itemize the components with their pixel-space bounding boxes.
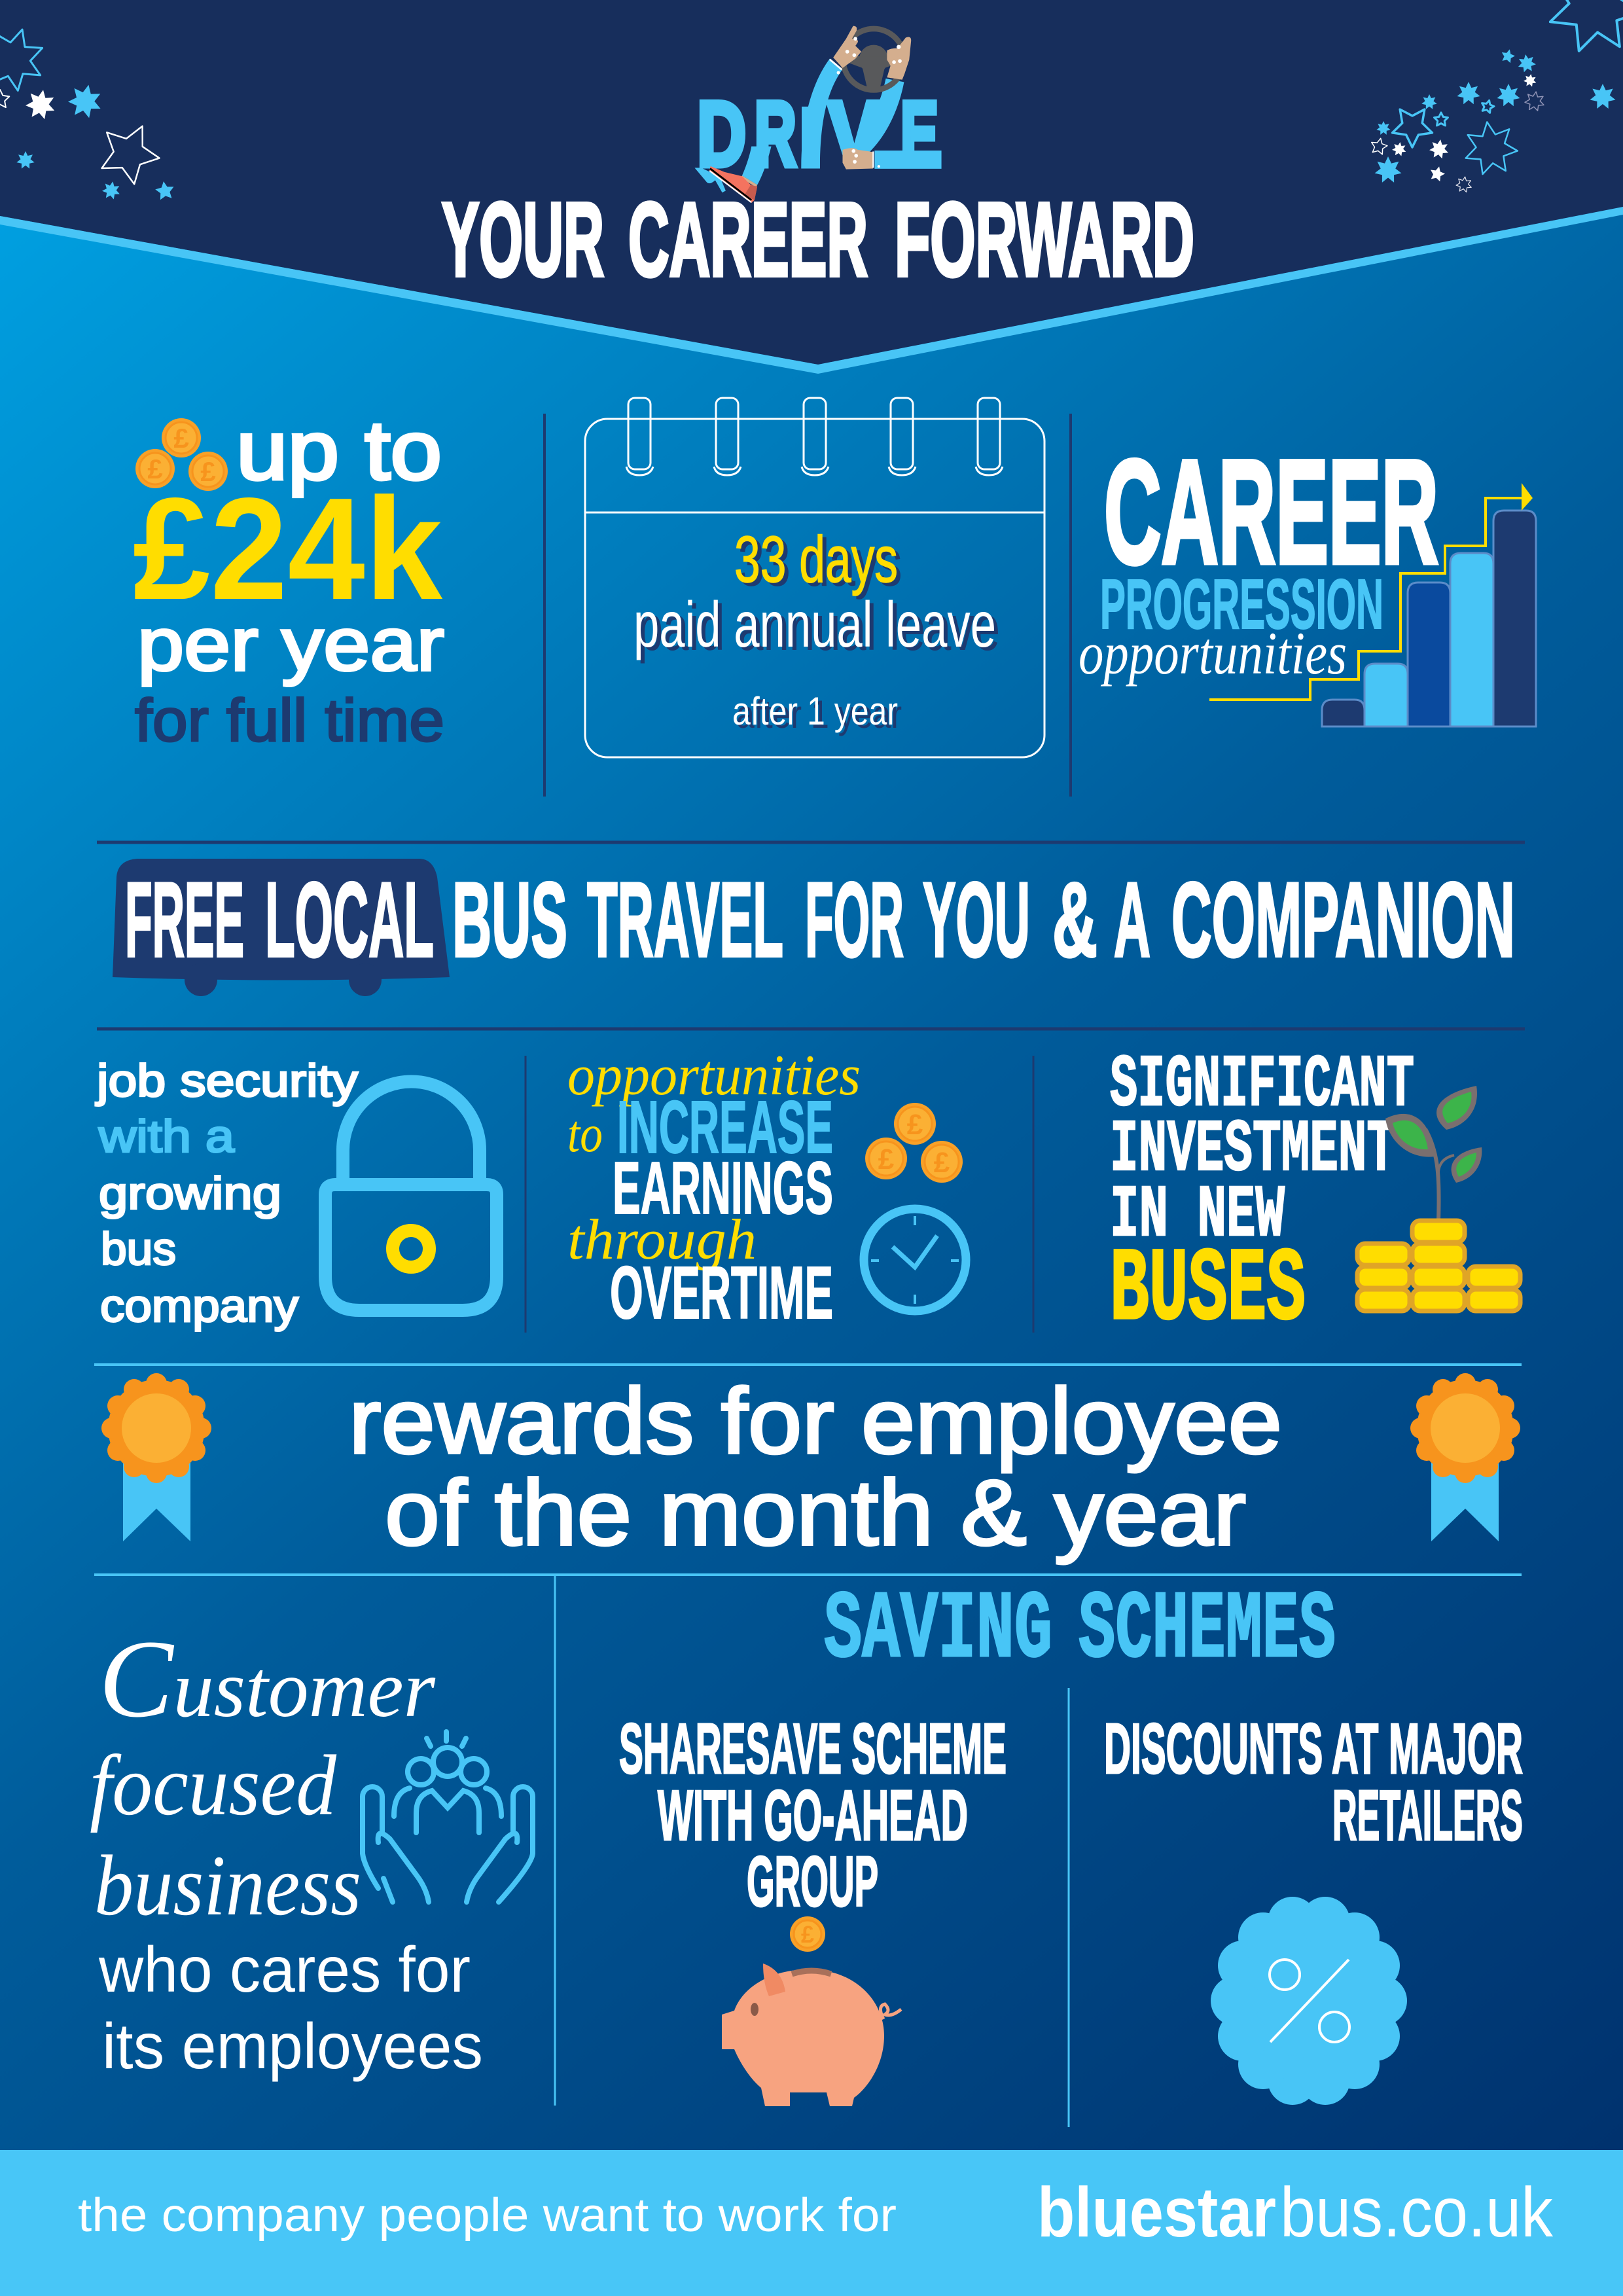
divider: below rewards: [94, 1573, 1522, 1576]
leave text: [633, 523, 996, 733]
divider: above benefits row: [97, 1028, 1525, 1030]
panel: investment in buses: [1110, 1044, 1520, 1350]
title: FORWARD: [895, 181, 1194, 298]
panel: job security: [96, 1055, 497, 1331]
bus travel text: &: [1052, 861, 1097, 979]
earnings text: through: [567, 1208, 757, 1272]
title: [442, 181, 1194, 298]
leave text: 33 days: [734, 523, 898, 596]
divider: above bus row: [97, 840, 1525, 844]
discounts text: [1104, 1709, 1523, 1856]
customer text: [90, 1617, 483, 2082]
bus travel text: A: [1114, 861, 1150, 979]
icon: clock: [864, 1209, 966, 1311]
icon: bus silhouette: [113, 859, 450, 996]
job security text: job security: [96, 1055, 358, 1106]
panel: rewards: [101, 1369, 1520, 1565]
footer tagline: the company people want to work for: [78, 2189, 897, 2242]
icon: plant growing from coins: [1385, 1086, 1482, 1221]
panel: customer focused: [90, 1617, 533, 2082]
rewards text: of the month & year: [385, 1461, 1246, 1565]
icon: coins: £: [878, 1143, 895, 1175]
customer text: Customer: [99, 1617, 436, 1740]
dividers: benefits row: [526, 1056, 1033, 1333]
icon: percent discount badge: [1211, 1897, 1407, 2105]
investment text: [1110, 1044, 1414, 1350]
arrow: rising yellow step line: [1209, 483, 1533, 700]
logo: Drive with driving arms and shoe: [694, 26, 942, 203]
career text: PROGRESSION: [1100, 564, 1383, 643]
bus travel text: TRAVEL: [587, 861, 783, 979]
icon: padlock: [325, 1081, 497, 1310]
earnings text: INCREASE: [617, 1086, 833, 1168]
investment text: BUSES: [1110, 1232, 1306, 1350]
customer text: its employees: [102, 2010, 483, 2082]
icon: piggy bank with coin: [722, 1916, 901, 2106]
footer band: [0, 2150, 1623, 2296]
earnings text: opportunities: [567, 1044, 861, 1107]
header band: [0, 0, 1623, 374]
footer website: bluestar: [1037, 2172, 1276, 2251]
stars: top right: [1370, 0, 1623, 192]
bus travel text: LOCAL: [265, 861, 434, 979]
heading: saving schemes: SCHEMES: [1079, 1576, 1336, 1685]
icon: coins: £: [173, 423, 189, 454]
divider: above rewards: [94, 1363, 1522, 1366]
heading: saving schemes: [824, 1576, 1336, 1685]
logo: Drive with driving arms and shoe: D: [697, 82, 746, 185]
sharesave text: [619, 1709, 1007, 1922]
customer text: business: [94, 1837, 361, 1933]
bus travel text: YOU: [923, 861, 1030, 979]
icon: coins: [135, 418, 228, 491]
sharesave text: GROUP: [747, 1842, 878, 1922]
job security text: with a: [98, 1111, 234, 1162]
sharesave text: WITH GO-AHEAD: [658, 1776, 968, 1856]
dividers: bottom row: [555, 1575, 1069, 2127]
job security text: [96, 1055, 358, 1331]
rewards text: [349, 1369, 1282, 1565]
salary text: per year: [137, 603, 444, 687]
stars: top left: [0, 20, 175, 200]
investment text: SIGNIFICANT: [1110, 1044, 1414, 1127]
bar chart: [1322, 511, 1536, 726]
panel: saving schemes: [619, 1576, 1523, 2106]
title: YOUR: [442, 181, 604, 298]
icon: calendar: [585, 398, 1044, 757]
heading: saving schemes: SAVING: [824, 1576, 1052, 1685]
sharesave text: SHARESAVE SCHEME: [619, 1709, 1007, 1789]
earnings text: to: [567, 1105, 603, 1163]
icon: coins: [865, 1103, 963, 1183]
icon: coins: £: [200, 456, 216, 487]
footer website: [1037, 2172, 1554, 2251]
salary text: £24k: [133, 468, 443, 630]
job security text: company: [100, 1280, 298, 1331]
title: CAREER: [628, 181, 868, 298]
rewards text: rewards for employee: [349, 1369, 1282, 1473]
bus travel text: FOR: [805, 861, 904, 979]
icon: piggy bank with coin: £: [801, 1921, 814, 1948]
panel: annual leave calendar: [585, 398, 1044, 757]
salary text: up to: [236, 404, 442, 497]
earnings text: OVERTIME: [610, 1251, 833, 1334]
earnings text: EARNINGS: [613, 1147, 833, 1229]
dividers: top row: [544, 414, 1071, 797]
job security text: growing: [99, 1168, 281, 1219]
investment text: INVESTMENT: [1110, 1109, 1395, 1192]
panel: increase earnings: [567, 1044, 966, 1334]
bus travel text: [125, 861, 1515, 979]
leave text: after 1 year: [732, 689, 898, 733]
icon: medal right: [1410, 1373, 1520, 1541]
icon: hands holding people: [363, 1732, 533, 1902]
logo: Drive with driving arms and shoe: R: [755, 82, 796, 185]
icon: coins: £: [934, 1147, 950, 1179]
investment text: IN NEW: [1110, 1174, 1285, 1257]
salary text: for full time: [135, 687, 444, 754]
career text: opportunities: [1079, 620, 1347, 687]
panel: salary: [133, 404, 444, 754]
panel: free bus travel: [113, 859, 1515, 996]
earnings text: [567, 1044, 861, 1334]
career text: [1079, 429, 1438, 687]
icon: coins: £: [147, 454, 163, 484]
job security text: bus: [101, 1223, 176, 1274]
icon: medal left: [101, 1373, 211, 1541]
customer text: focused: [90, 1737, 337, 1833]
footer website: bus.co.uk: [1280, 2172, 1554, 2251]
icon: coins: £: [907, 1109, 923, 1141]
customer text: who cares for: [98, 1933, 471, 2005]
icon: coin stacks: [1357, 1221, 1520, 1311]
panel: career progression: [1079, 429, 1536, 726]
bus travel text: BUS: [452, 861, 567, 979]
logo: Drive with driving arms and shoe: E: [901, 82, 938, 185]
salary text: [133, 404, 444, 754]
leave text: paid annual leave: [633, 588, 996, 660]
bus travel text: FREE: [125, 861, 244, 979]
logo: Drive with driving arms and shoe: V: [828, 82, 880, 185]
